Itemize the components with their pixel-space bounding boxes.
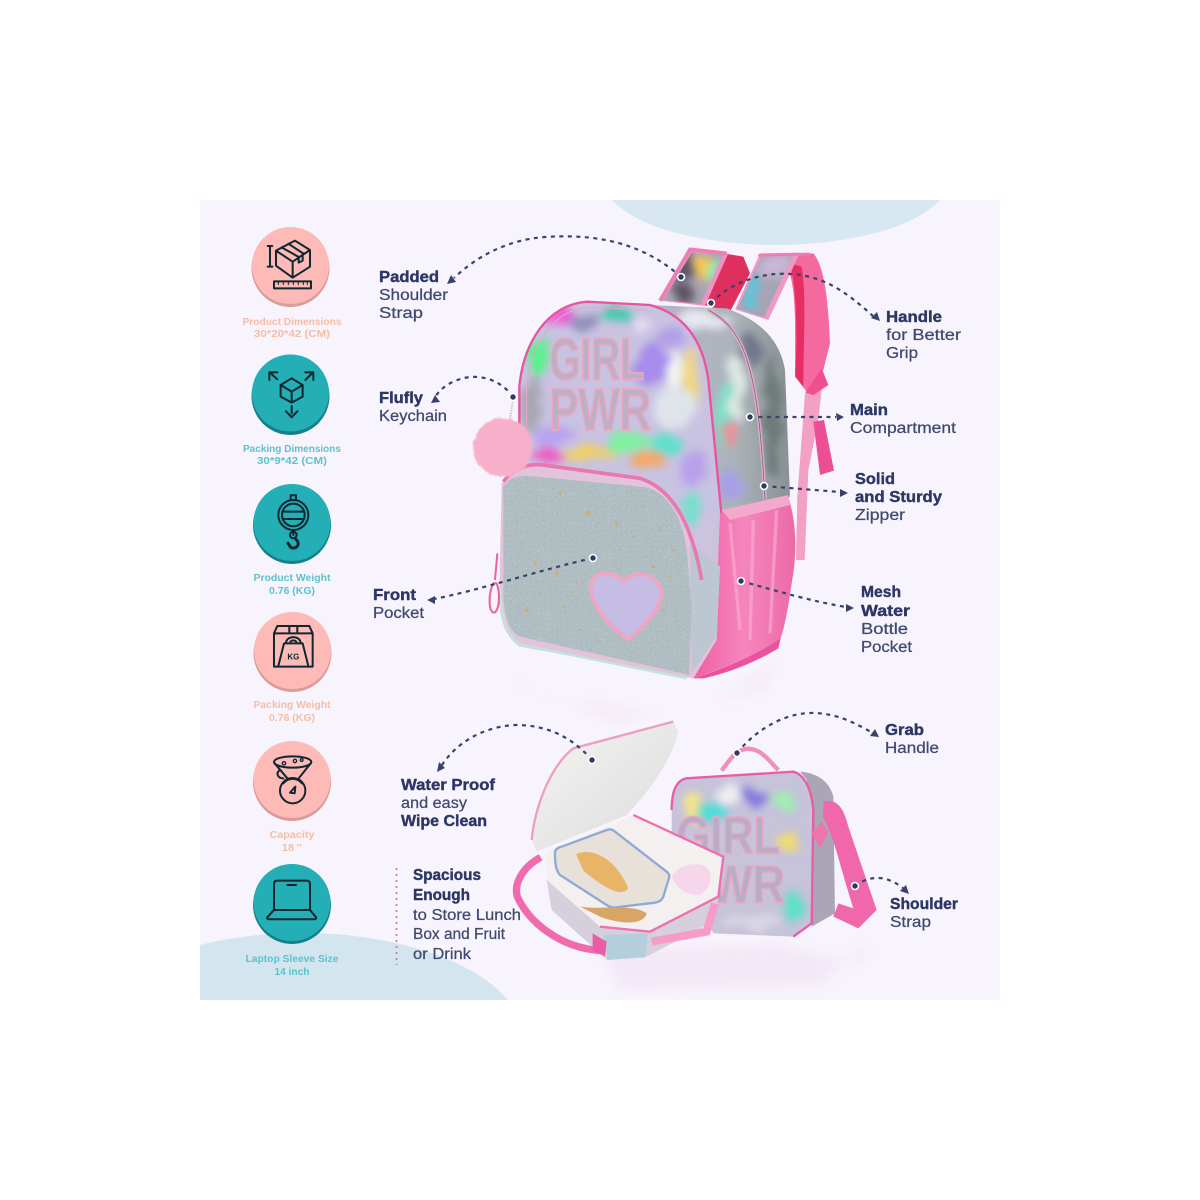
label: zipper: Solid	[855, 471, 895, 488]
spec column	[242, 227, 342, 978]
pink bottle	[672, 864, 710, 895]
label: zipper: and Sturdy	[855, 489, 942, 506]
decorative wave: bottom left	[200, 933, 508, 1000]
GIRL PWR patch lettering: GIRL	[549, 325, 644, 392]
label: water proof: and easy	[401, 795, 467, 812]
leader: water proof	[437, 725, 596, 772]
backpack illustration	[473, 237, 834, 678]
open lunch bag body	[545, 815, 723, 960]
leader: main compartment	[746, 413, 844, 421]
caption: capacity: Capacity	[270, 830, 315, 841]
leader: fluffy keychain	[431, 377, 516, 403]
leader: shoulder strap	[852, 878, 909, 894]
caption: product weight: Product Weight	[254, 573, 331, 584]
GIRL PWR patch lettering: PWR	[549, 376, 651, 443]
caption: product dimensions: Product Dimensions	[242, 317, 342, 328]
webbing	[796, 390, 822, 560]
label: spacious enough: Box and Fruit	[413, 926, 506, 943]
mesh water bottle pocket	[693, 495, 795, 678]
spec: product weight	[253, 484, 331, 584]
keychain pom pom	[473, 397, 532, 477]
label: fluffy keychain: Flufly	[379, 390, 423, 407]
divider: spacious enough	[396, 868, 398, 965]
label: spacious enough: to Store Lunch	[413, 907, 521, 924]
leader: front pocket	[427, 554, 596, 604]
spec: packing dimensions	[243, 354, 341, 455]
icon: cube with arrows	[269, 372, 313, 417]
open bag strap foreground	[652, 903, 715, 942]
leader: mesh pocket	[738, 578, 854, 612]
caption: packing dimensions value: 30*9*42 (CM)	[257, 456, 327, 467]
front pocket	[490, 464, 720, 678]
label: handle: Handle	[886, 309, 942, 326]
caption: packing weight: Packing Weight	[254, 700, 331, 711]
icon: hanging scale	[278, 495, 308, 548]
label: shoulder strap: Shoulder	[890, 896, 958, 913]
decorative wave: top	[612, 200, 940, 245]
caption: laptop sleeve: Laptop Sleeve Size	[246, 954, 339, 965]
shoulder straps	[703, 253, 750, 312]
spec: packing weight	[254, 612, 332, 711]
zipper pull loop	[490, 553, 499, 613]
label: mesh pocket: Water	[861, 603, 910, 620]
leader: handle	[708, 274, 880, 321]
label: front pocket: Front	[373, 587, 416, 604]
icon: funnel with gauge	[274, 756, 311, 803]
cross-body strap	[823, 801, 877, 928]
label: water proof: Wipe Clean	[401, 813, 487, 830]
closed lunch bag: PWR	[680, 856, 785, 915]
label: spacious enough: Spacious	[413, 867, 481, 884]
bread	[576, 852, 628, 892]
label: mesh pocket: Mesh	[861, 584, 901, 601]
food container	[555, 829, 669, 908]
caption: packing weight value: 0.76 (KG)	[269, 713, 315, 724]
panel: background	[200, 200, 1000, 1000]
side panel	[650, 305, 790, 513]
label: main compartment: Main	[850, 402, 888, 419]
label: padded shoulder strap: Strap	[379, 305, 423, 322]
caption: laptop sleeve value: 14 inch	[274, 967, 310, 978]
label: mesh pocket: Pocket	[861, 639, 913, 656]
caption: product dimensions value: 30*20*42 (CM)	[254, 329, 330, 340]
label: padded shoulder strap: Padded	[379, 269, 439, 286]
label: zipper: Zipper	[855, 507, 905, 524]
caption: packing dimensions: Packing Dimensions	[243, 444, 341, 455]
closed lunch bag	[672, 749, 877, 937]
label: main compartment: Compartment	[850, 420, 957, 437]
icon: box with ruler	[268, 241, 311, 288]
label: padded shoulder strap: Shoulder	[379, 287, 448, 304]
GIRL PWR patch lettering	[549, 325, 651, 443]
reflection under backpack	[505, 655, 780, 722]
label: grab handle: Handle	[885, 740, 939, 757]
spec: capacity	[253, 741, 331, 841]
open lunch bag lid	[532, 722, 678, 852]
icon: laptop	[267, 881, 316, 919]
reflection under lunch bags	[600, 940, 870, 990]
label: shoulder strap: Strap	[890, 914, 931, 931]
label: spacious enough: Enough	[413, 887, 470, 904]
glitter speckles	[525, 492, 675, 631]
back padding	[788, 253, 830, 392]
leader: zipper	[760, 482, 848, 497]
leader: grab handle	[734, 713, 879, 756]
label: mesh pocket: Bottle	[861, 621, 908, 638]
caption: product weight value: 0.76 (KG)	[269, 586, 315, 597]
spec: product dimensions	[242, 227, 342, 328]
open lunch bag strap	[516, 857, 602, 951]
label: handle: Grip	[886, 345, 918, 362]
label: grab handle: Grab	[885, 722, 924, 739]
lunch bag illustration	[516, 722, 877, 960]
lunch bag lettering: GIRL	[677, 806, 780, 865]
heart patch	[591, 573, 661, 639]
caption: capacity value: 18 ''	[282, 843, 302, 854]
leader: padded shoulder strap	[447, 236, 684, 284]
label: water proof: Water Proof	[401, 777, 496, 794]
label: fluffy keychain: Keychain	[379, 408, 447, 425]
label: handle: for Better	[886, 327, 961, 344]
label: spacious enough: or Drink	[413, 946, 471, 963]
front panel	[510, 302, 722, 567]
label: front pocket: Pocket	[373, 605, 425, 622]
spec: laptop sleeve	[246, 864, 339, 965]
icon: parcel with kg weight: KG	[287, 652, 299, 661]
